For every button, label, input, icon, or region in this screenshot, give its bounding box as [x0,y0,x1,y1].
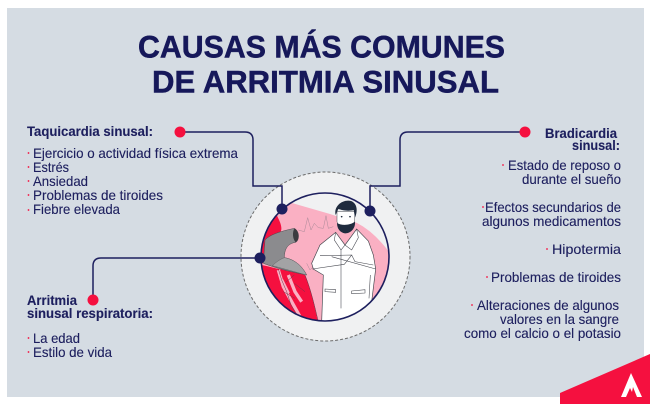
title: CAUSAS MÁS COMUNES [138,28,505,64]
connector: taquicardia [174,126,288,214]
text block: bradicardia sinusal: durante el sueño [522,172,621,187]
text block: taquicardia sinusal: Ejercicio o actividad física extrema [33,146,238,161]
doctor coat [312,229,376,322]
title: DE ARRITMIA SINUSAL [152,64,499,100]
connector: arritmia respiratoria [88,252,266,306]
text block: arritmia sinusal respiratoria [27,293,153,360]
text block: taquicardia sinusal: Estrés [33,160,69,175]
title [138,28,505,100]
text block: bradicardia sinusal: Problemas de tiroides [491,270,621,285]
text block: taquicardia sinusal: Ansiedad [33,174,88,189]
text block: bradicardia sinusal [464,126,621,341]
doctor head [336,211,355,225]
text block: arritmia sinusal respiratoria: Estilo de vida [33,345,112,360]
text block: bradicardia sinusal: Estado de reposo o [508,158,621,173]
text block: bradicardia sinusal: como el calcio o el potasio [464,326,621,341]
central illustration [241,172,410,341]
text block: taquicardia sinusal: Taquicardia sinusal: [27,124,153,139]
text block: arritmia sinusal respiratoria: La edad [33,331,80,346]
corner logo [560,354,650,404]
heart red [262,216,318,320]
text block: bradicardia sinusal: algunos medicamentos [482,214,621,229]
text block: taquicardia sinusal: Problemas de tiroides [33,188,163,203]
text block: taquicardia sinusal [27,124,238,217]
text block: bradicardia sinusal: sinusal: [572,138,620,153]
heart top vessel [263,228,307,275]
text block: bradicardia sinusal: Alteraciones de algunos [477,298,619,313]
coat details [312,229,376,308]
text block: bradicardia sinusal: Efectos secundarios de [485,200,621,215]
text block: bradicardia sinusal: Hipotermia [552,242,621,257]
pink background [262,203,388,320]
heart veins [278,270,302,317]
text block: bradicardia sinusal: Bradicardia [545,126,617,141]
text block: arritmia sinusal respiratoria: Arritmia [27,293,77,308]
ecg line [298,216,333,232]
text block: taquicardia sinusal: Fiebre elevada [33,202,120,217]
text block: bradicardia sinusal: valores en la sangre [500,312,619,327]
text block: arritmia sinusal respiratoria: sinusal respiratoria: [27,306,153,321]
connector: bradicardia [364,126,530,216]
